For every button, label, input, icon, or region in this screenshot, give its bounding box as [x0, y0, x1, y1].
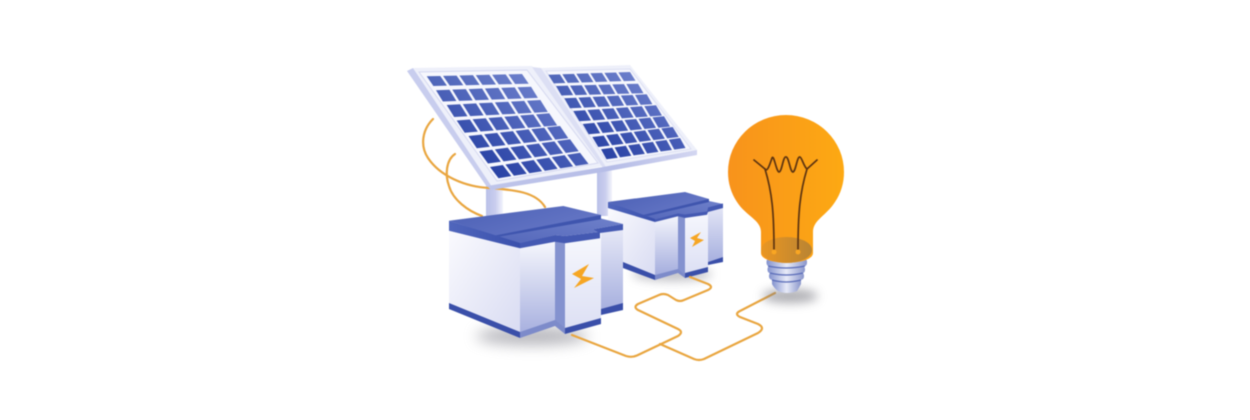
bulb shadow — [762, 289, 818, 303]
light bulb — [728, 115, 844, 303]
small battery — [608, 192, 723, 280]
connecting wires — [572, 277, 775, 360]
left solar panel — [407, 66, 604, 187]
bulb glass — [728, 115, 844, 263]
filament contacts — [772, 250, 800, 254]
right solar panel — [532, 65, 697, 168]
left support post — [486, 185, 503, 219]
right support post — [597, 168, 612, 216]
filament — [754, 157, 817, 251]
icon: lightning bolt — [572, 264, 594, 288]
solar panel wires — [423, 119, 545, 216]
icon: small lightning bolt — [690, 232, 704, 247]
panel bottom edge — [487, 150, 697, 190]
bulb screw base — [766, 258, 807, 293]
large battery — [449, 206, 623, 338]
battery shadows — [476, 267, 712, 345]
bulb glass base — [761, 237, 812, 263]
